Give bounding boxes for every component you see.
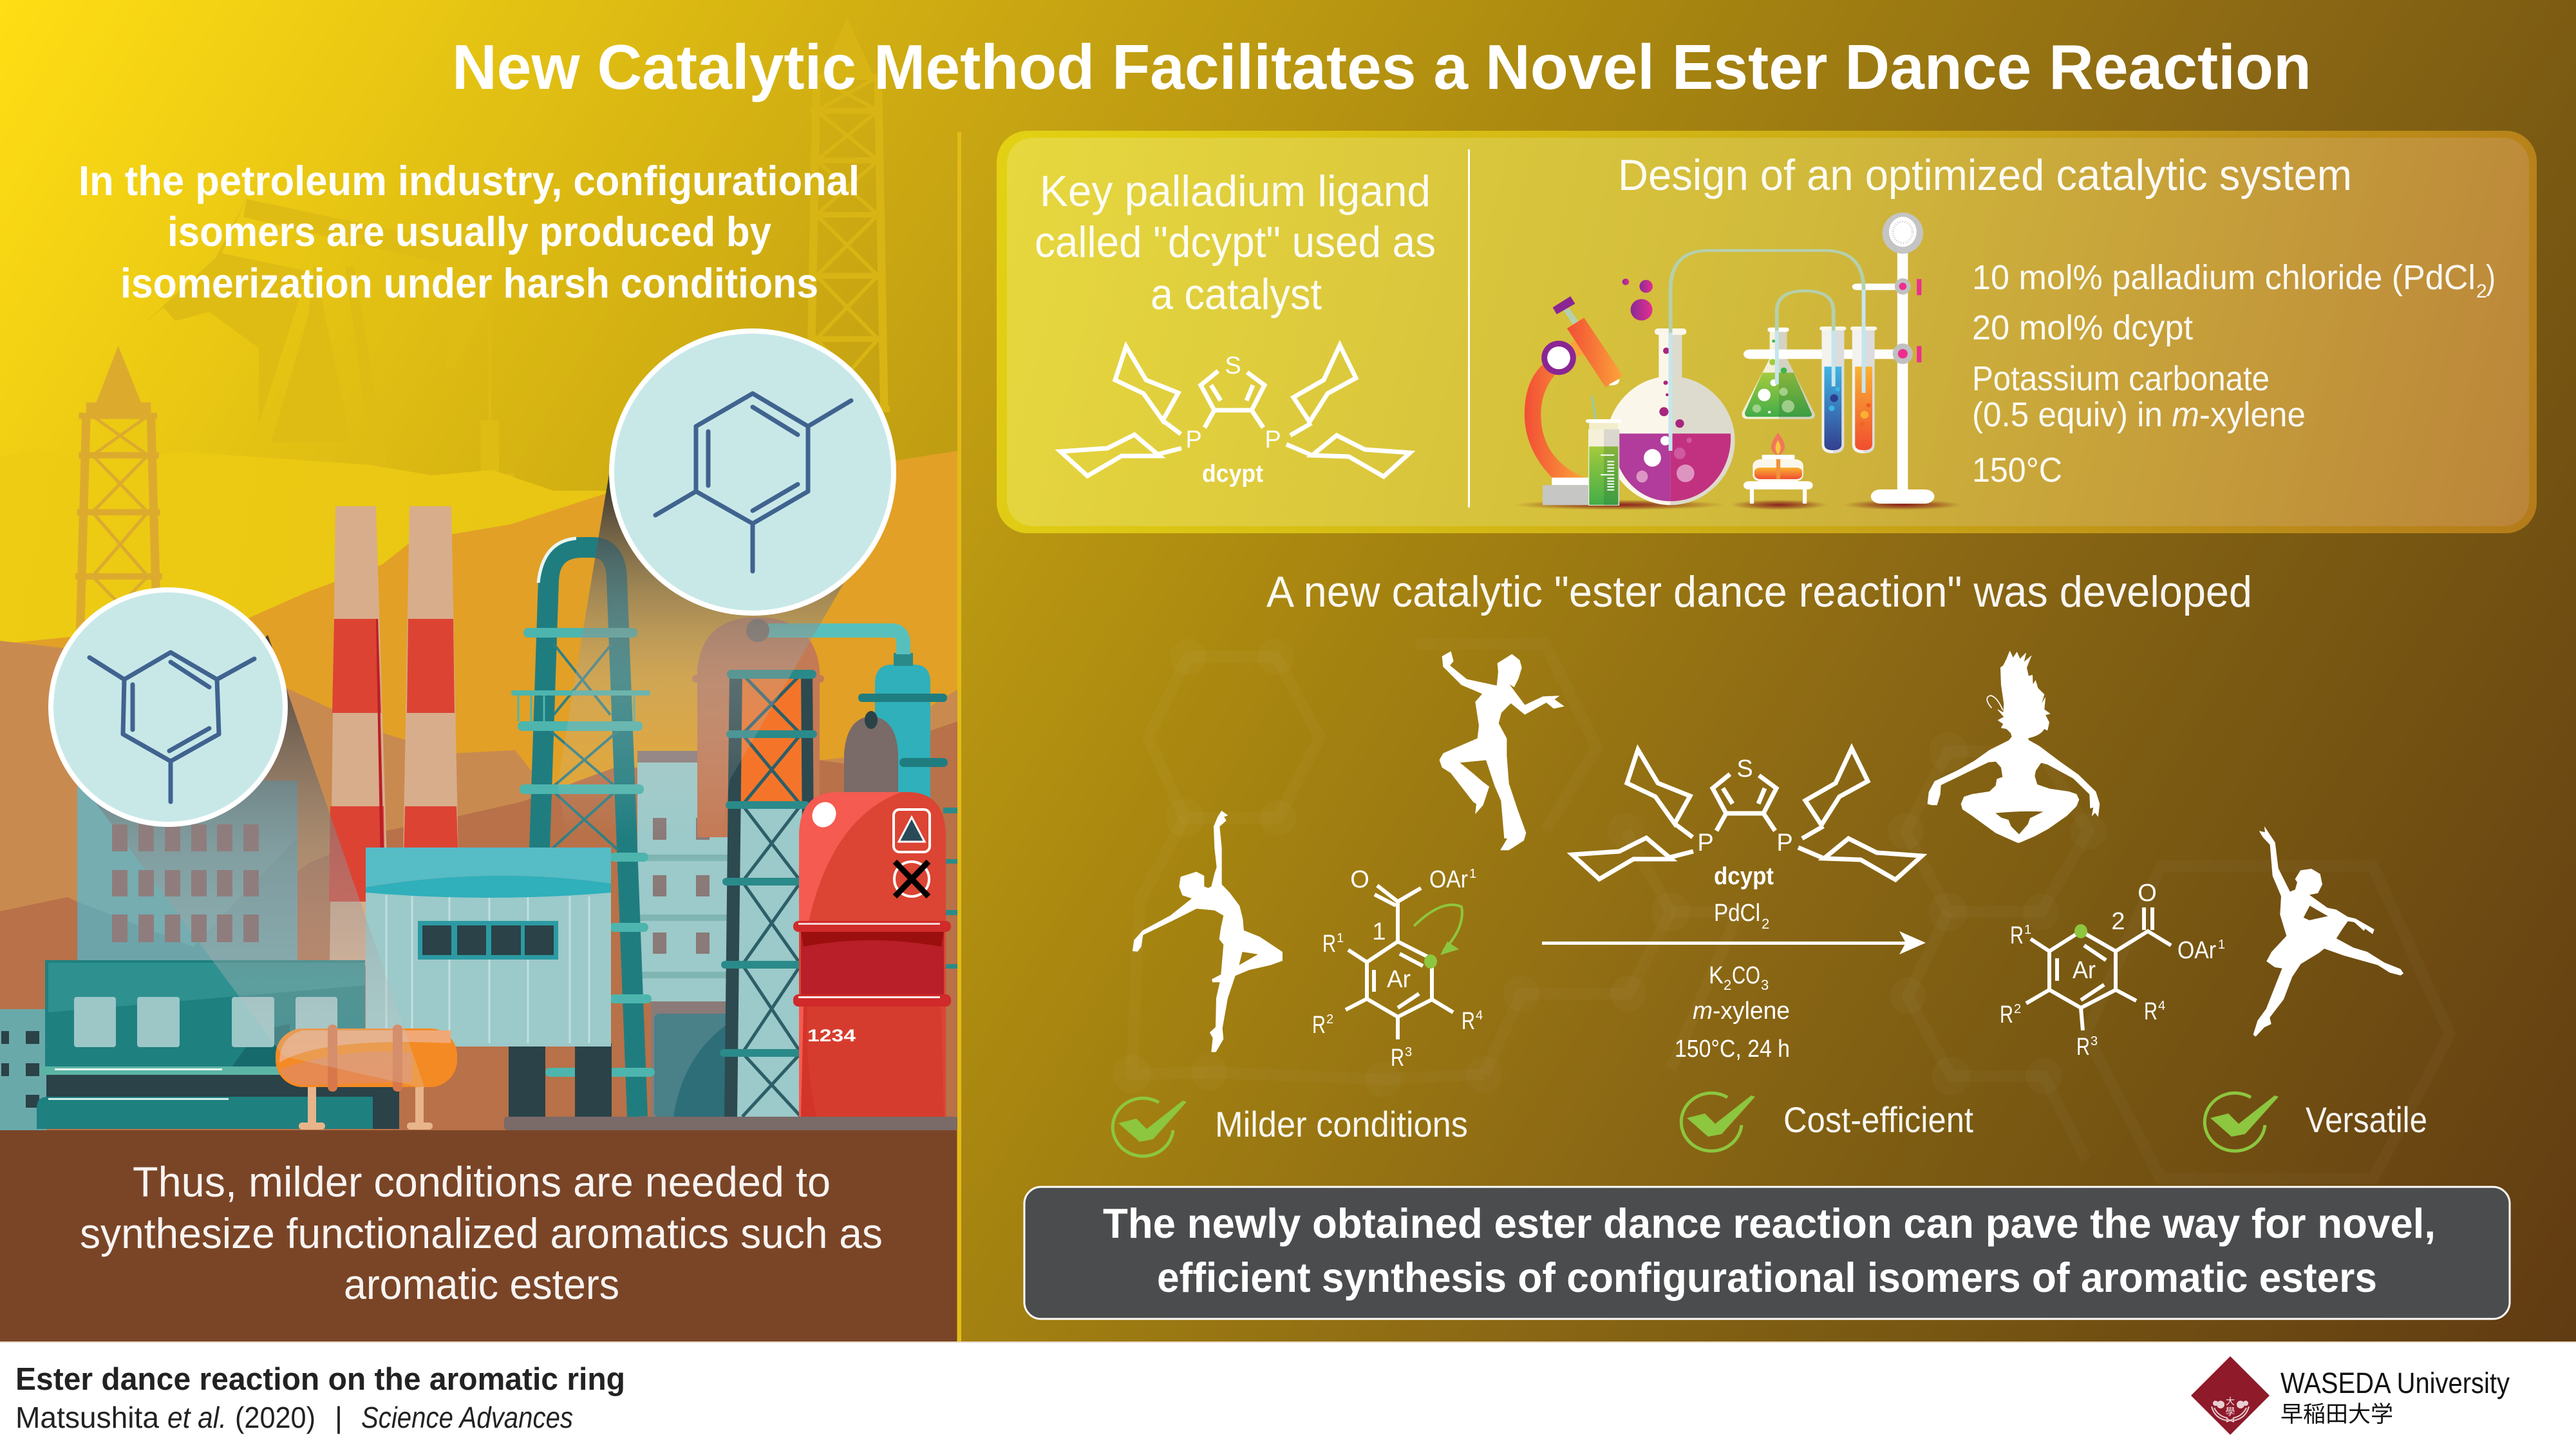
teal column with pipe [746, 619, 958, 969]
reactant structure: Ar [1387, 966, 1411, 993]
conclusion text: The newly obtained ester dance reaction can pave the way for novel, [1103, 1200, 2436, 1247]
reaction conditions below arrow [1675, 962, 1790, 1063]
oil derrick silhouette left [75, 357, 162, 633]
reaction conditions below arrow: 150°C, 24 h [1675, 1036, 1790, 1063]
lab equipment illustration [1513, 213, 1962, 510]
reagents list: 2 [2476, 281, 2487, 302]
reactant structure: 1 [1469, 867, 1476, 881]
reaction arrow [1542, 931, 1926, 954]
footer citation: et al. [167, 1401, 227, 1434]
band text: aromatic esters [344, 1260, 619, 1308]
reaction conditions above arrow: dcypt [1714, 863, 1774, 890]
conclusion text: efficient synthesis of configurational isomers of aromatic esters [1157, 1254, 2377, 1301]
Waseda wordmark: WASEDA University [2280, 1367, 2510, 1399]
bulb tank behind tower [692, 617, 824, 837]
dcypt structure large [1572, 748, 1922, 880]
crest: 學 [2225, 1406, 2235, 1417]
left heading [79, 157, 860, 307]
pumpjack silhouette [142, 199, 514, 483]
product structure: 2 [2014, 1002, 2021, 1016]
footer citation: | [335, 1401, 343, 1434]
footer title: Ester dance reaction on the aromatic ring [15, 1362, 625, 1397]
clamp bars [1744, 278, 1921, 364]
dancer silhouette 3 [1928, 651, 2100, 842]
lens: large molecule [612, 331, 894, 613]
retort stand [1871, 213, 1934, 504]
reagents list: 10 mol% palladium chloride (PdCl [1972, 258, 2476, 297]
grey-teal office block [77, 781, 297, 967]
band text: Thus, milder conditions are needed to [133, 1158, 831, 1206]
design heading: Design of an optimized catalytic system [1618, 151, 2352, 200]
product structure: Ar [2073, 957, 2096, 984]
product structure: R [2000, 1001, 2013, 1028]
reactant structure: O [1350, 866, 1369, 893]
lens: small molecule [51, 590, 285, 824]
Waseda logo [2191, 1356, 2510, 1435]
platform [504, 1117, 958, 1130]
chimney left [329, 506, 390, 966]
dark lattice tower [720, 670, 817, 1118]
product structure: R [2144, 998, 2158, 1025]
chimney right [403, 506, 458, 863]
oil derrick silhouette top [810, 27, 890, 409]
cylinder number: 1234 [807, 1026, 856, 1045]
magnifier beam large [558, 470, 844, 837]
reaction conditions below arrow: 2 [1724, 977, 1731, 993]
reagents list [1972, 258, 2496, 489]
far yellow hills [0, 448, 958, 708]
office block windows [112, 824, 259, 942]
reagents list: (0.5 equiv) in m-xylene [1972, 395, 2306, 434]
dcypt structure small: S [1225, 352, 1241, 379]
reagents list: 20 mol% dcypt [1972, 308, 2193, 347]
no-fire symbol [894, 862, 929, 896]
product structure: 1 [2218, 938, 2225, 952]
dcypt structure large: P [1776, 829, 1793, 857]
landscape: orange hills [0, 451, 958, 1133]
dancer silhouette 2 [1440, 652, 1564, 850]
ligand heading: a catalyst [1151, 270, 1322, 319]
ligand heading [1035, 167, 1436, 319]
spirit burner [1744, 433, 1813, 504]
dcypt structure small [1060, 345, 1410, 477]
reaction conditions below arrow: K [1709, 962, 1724, 989]
reagents list: 150°C [1972, 451, 2062, 489]
reactant structure: R [1322, 931, 1336, 958]
left heading: isomerization under harsh conditions [120, 260, 818, 307]
floating bubbles [1622, 279, 1653, 321]
magnifier beam small [92, 635, 425, 1088]
reaction conditions below arrow: CO [1732, 962, 1760, 989]
ligand heading: called "dcypt" used as [1035, 218, 1436, 267]
round-bottom flask [1606, 328, 1735, 505]
reaction conditions above arrow: 2 [1762, 916, 1769, 932]
reactant structure [1312, 866, 1483, 1072]
product structure: OAr [2177, 937, 2216, 964]
footer [0, 1341, 2576, 1449]
panel: catalyst system [997, 131, 2537, 533]
product structure: O [2138, 880, 2157, 907]
orange test tube [1850, 327, 1877, 453]
reactant structure: 2 [1326, 1012, 1333, 1027]
product structure: R [2076, 1034, 2090, 1061]
conclusion text [1103, 1200, 2436, 1301]
green position marker [2074, 924, 2087, 938]
benefit: milder conditions [1113, 1098, 1468, 1156]
Waseda Japanese wordmark: 早稲田大学 [2280, 1402, 2393, 1427]
blue test tube [1819, 327, 1846, 453]
product structure [2000, 880, 2225, 1061]
dcypt structure small: P [1185, 426, 1202, 453]
reactant structure: R [1391, 1045, 1404, 1072]
dcypt structure large: P [1697, 829, 1714, 857]
crest [2212, 1396, 2249, 1422]
reactant structure: R [1312, 1012, 1326, 1039]
footer citation: Matsushita [15, 1401, 159, 1434]
small left building [0, 1009, 46, 1130]
footer citation: Science Advances [361, 1401, 573, 1434]
product structure: 1 [2024, 923, 2031, 937]
reaction conditions below arrow: 3 [1761, 977, 1769, 993]
reactant structure: 3 [1405, 1045, 1412, 1059]
brown text band [0, 1130, 957, 1341]
hexagon molecule watermark [1113, 639, 2450, 1179]
product structure: 3 [2091, 1034, 2098, 1048]
reaction conditions above arrow: PdCl [1714, 900, 1760, 927]
conclusion box [1024, 1187, 2510, 1319]
reactant structure: 4 [1476, 1009, 1483, 1023]
graduated cylinder [1586, 396, 1621, 506]
benefit: cost-efficient [1681, 1093, 1973, 1151]
centre grey building [637, 751, 731, 1117]
microscope [1525, 296, 1623, 505]
reaction conditions above arrow [1714, 863, 1774, 932]
reactant structure: OAr [1429, 866, 1468, 893]
dancer silhouette 1 [1133, 811, 1283, 1052]
dcypt label small: dcypt [1202, 460, 1263, 488]
connecting tubes [1671, 251, 1864, 451]
conical flask [1742, 328, 1815, 419]
blue prefab building [366, 848, 612, 1117]
product structure: R [2010, 922, 2024, 949]
reaction heading: A new catalytic "ester dance reaction" was developed [1266, 567, 2252, 616]
product structure: 4 [2158, 999, 2165, 1013]
vertical divider [957, 132, 961, 1341]
left heading: isomers are usually produced by [167, 208, 771, 255]
reactant structure: R [1462, 1008, 1475, 1035]
reactant structure: 1 [1337, 931, 1344, 945]
benefit: versatile [2205, 1093, 2427, 1151]
warning sign [894, 810, 930, 852]
orange horizontal tank [276, 1025, 457, 1130]
benefit: milder conditions: Milder conditions [1215, 1104, 1468, 1144]
ligand heading: Key palladium ligand [1040, 167, 1431, 216]
product structure: 2 [2111, 908, 2125, 935]
left heading: In the petroleum industry, configurational [79, 157, 860, 204]
dcypt structure large: S [1736, 755, 1753, 782]
dcypt structure small: P [1264, 426, 1281, 453]
tall teal tower [511, 538, 655, 1117]
band text [80, 1158, 883, 1308]
low teal building [37, 960, 399, 1129]
title: New Catalytic Method Facilitates a Novel Ester Dance Reaction [452, 32, 2311, 102]
benefit: versatile: Versatile [2306, 1099, 2427, 1140]
dancer silhouette 4 [2253, 827, 2403, 1036]
reaction conditions below arrow: m-xylene [1693, 998, 1790, 1025]
red gas cylinder [793, 711, 951, 1117]
band text: synthesize functionalized aromatics such as [80, 1209, 883, 1257]
green migration arrow [1414, 905, 1462, 969]
reagents list: ) [2486, 258, 2496, 297]
benefit: cost-efficient: Cost-efficient [1783, 1099, 1973, 1140]
factory illustration [0, 470, 958, 1130]
footer citation: (2020) [235, 1401, 315, 1434]
crest: 大 [2226, 1396, 2235, 1406]
reagents list: Potassium carbonate [1972, 359, 2270, 398]
reactant structure: 1 [1372, 918, 1386, 945]
